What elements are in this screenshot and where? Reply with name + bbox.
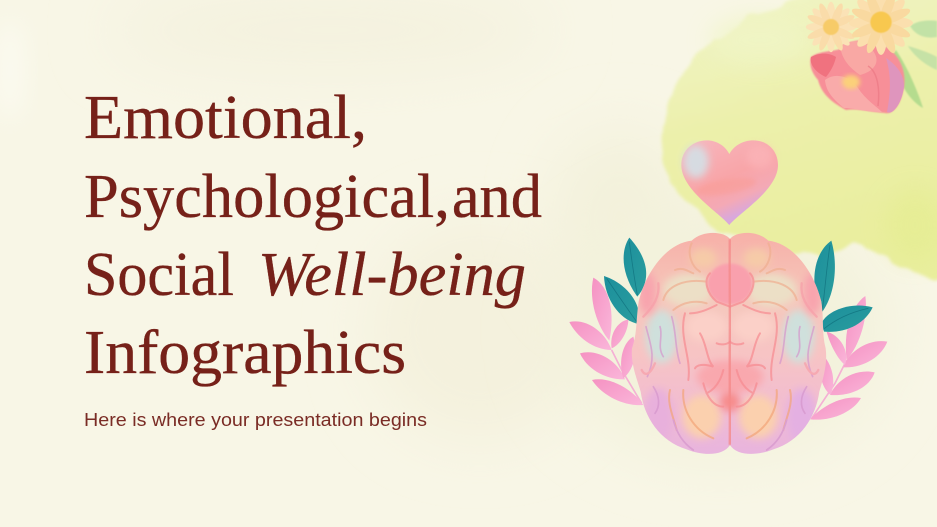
title: Emotional, [84, 84, 367, 152]
watercolor blob: yellow-green wash [662, 0, 937, 276]
central fissure [729, 239, 731, 445]
folds right [730, 243, 818, 450]
green leaves [892, 21, 937, 108]
daisy right [849, 0, 913, 55]
title: Social [84, 241, 234, 309]
title: Infographics [84, 319, 406, 387]
teal leaves [604, 238, 873, 332]
brain illustration group [569, 140, 887, 454]
heart [681, 140, 778, 225]
pink branch right [810, 296, 887, 420]
title: Psychological,and [84, 163, 542, 231]
colour washes [646, 310, 678, 363]
peony [810, 40, 904, 113]
subtitle: Here is where your presentation begins [84, 410, 427, 430]
pink branch left [569, 278, 643, 405]
daisy left [806, 2, 856, 52]
flowers bouquet [806, 0, 937, 113]
title: Well-being [258, 241, 526, 309]
brain [632, 233, 826, 454]
title [84, 84, 542, 387]
folds left [642, 243, 730, 450]
